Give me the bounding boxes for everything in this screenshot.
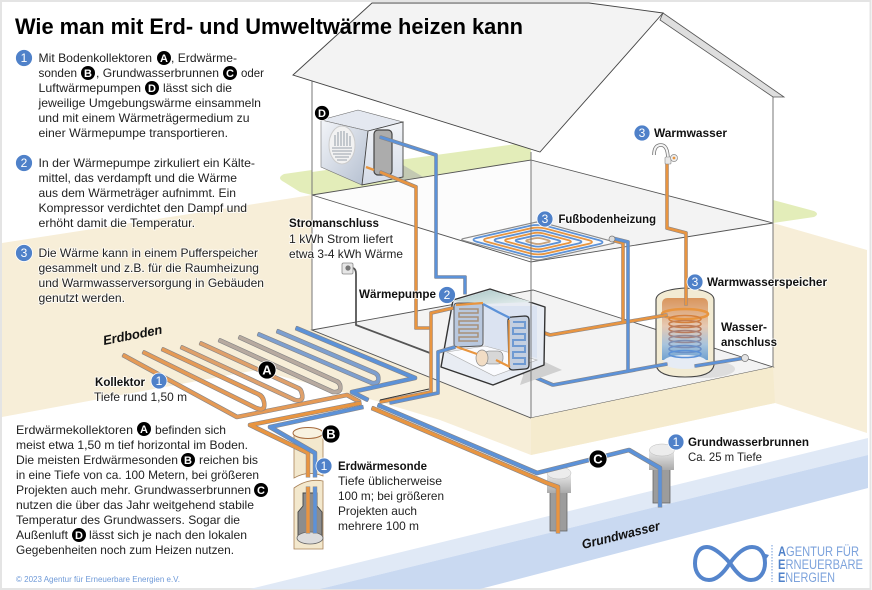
number badge (668, 434, 684, 450)
lower explanatory text: nutzen die über das Jahr weitgehend stabile (16, 498, 254, 512)
label: Kollektor (94, 373, 187, 404)
pump shadow (520, 355, 562, 385)
probe tip body (298, 493, 322, 536)
label: Kollektor: Kollektor (95, 375, 145, 389)
label: Warmwasser (634, 125, 727, 141)
number badge: 3 (639, 126, 646, 140)
house structure (293, 3, 784, 455)
pipes from unit D to heat pump (380, 137, 465, 328)
evaporator (454, 303, 483, 347)
shadow of outdoor unit (395, 165, 425, 183)
tank body (656, 288, 714, 377)
label: Kollektor: Tiefe rund 1,50 m (94, 390, 187, 404)
well pipes blue (378, 405, 660, 507)
logo: wordmark: AGENTUR FÜR (778, 544, 859, 559)
house: ground floor (312, 290, 773, 418)
number badge: 2 (444, 288, 451, 302)
badge B: B (84, 68, 92, 80)
label: Wärmepumpe (359, 286, 456, 304)
floor valve (609, 236, 615, 242)
text block 2: Kompressor verdichtet den Dampf und (38, 201, 247, 215)
badge D on unit: D (318, 108, 326, 120)
badge D: D (148, 83, 156, 95)
copyright: © 2023 Agentur für Erneuerbare Energien e.V. (16, 574, 180, 584)
text block 1: , Grundwasserbrunnen (96, 66, 219, 80)
text block 2: erhöht damit die Temperatur. (38, 216, 195, 230)
badge D (145, 81, 159, 95)
pump top (454, 290, 532, 304)
number badge 1: 1 (21, 51, 28, 65)
refrigerant return (483, 304, 510, 318)
text block 2 (16, 154, 255, 230)
text block 3: und Warmwasserversorgung in Gebäuden (38, 276, 264, 290)
badge D on unit (314, 106, 330, 120)
label: Grundwasser: Grundwasser (580, 518, 662, 552)
badge A: A (160, 53, 168, 65)
heating flow orange (513, 240, 667, 335)
unit orange stub (366, 167, 374, 170)
roof gable edge (660, 13, 784, 97)
number badge 3 (16, 244, 32, 262)
text block 3: gesammelt und z.B. für die Raumheizung (38, 261, 259, 275)
text block 1: , Erdwärme- (171, 51, 237, 65)
label: Erdwärmesonde: mehrere 100 m (338, 519, 419, 533)
lower explanatory text: Außenluft (16, 528, 69, 542)
logo: wordmark (778, 544, 863, 585)
badge A (157, 51, 171, 65)
condenser (508, 316, 529, 370)
badge C: C (226, 68, 234, 80)
unit fan (329, 126, 355, 164)
borehole probe B (250, 403, 363, 549)
pump refrigerant lines (456, 303, 510, 367)
wells (372, 405, 674, 533)
lower explanatory text: Projekten auch mehr. Grundwasserbrunnen (16, 483, 251, 497)
lower explanatory text: reichen bis (199, 453, 258, 467)
number badge: 1 (156, 374, 163, 388)
collector loop 2 (143, 349, 264, 409)
number badge 1 (16, 50, 32, 66)
pump connector lines (380, 308, 453, 402)
unit coil (374, 130, 392, 175)
number badge: 1 (321, 459, 328, 473)
hot water storage tank (656, 288, 735, 378)
unit front face (321, 120, 368, 185)
probe pipes (250, 403, 361, 533)
badge C (223, 66, 237, 80)
lower explanatory text: Erdwärmekollektoren (16, 423, 133, 437)
badge D (72, 528, 86, 542)
heat pump unit (380, 289, 562, 403)
front house corner line (530, 152, 532, 418)
roof face (293, 3, 663, 152)
text block 2: In der Wärmepumpe zirkuliert ein Kälte- (38, 156, 255, 170)
groundwater bands (250, 438, 868, 589)
label: Fußbodenheizung (537, 211, 656, 227)
badge D: D (75, 530, 83, 542)
lower explanatory text: meist etwa 1,50 m tief horizontal im Boden. (16, 438, 248, 452)
lower explanatory text: Gegebenheiten noch zum Heizen nutzen. (16, 543, 234, 557)
label: Wasseranschluss: anschluss (721, 335, 777, 349)
lower explanatory text: befinden sich (155, 423, 226, 437)
tank bottom (663, 355, 707, 369)
house: left wall (311, 80, 313, 330)
ground: Erdboden sand area (2, 195, 867, 455)
number badge (687, 274, 703, 290)
collector loop 5 (258, 331, 378, 383)
heating circuit pipes (513, 145, 748, 385)
text block 2: mittel, das verdampft und die Wärme (38, 171, 237, 185)
number badge: 3 (542, 212, 549, 226)
text block 1 (16, 50, 264, 140)
compressor (476, 350, 503, 366)
label: Wasseranschluss (721, 320, 777, 349)
well left (547, 467, 571, 531)
label: Grundwasserbrunnen (668, 434, 809, 464)
title: Wie man mit Erd- und Umweltwärme heizen kann (15, 14, 523, 39)
heating coil (469, 224, 607, 258)
label: Erdwärmesonde: 100 m; bei größeren (338, 489, 444, 503)
water connection valve (742, 354, 748, 362)
logo: dotted divider (771, 545, 773, 582)
house: right wall (772, 97, 774, 367)
label: Warmwasserspeicher: Warmwasserspeicher (707, 275, 827, 289)
tap (654, 145, 678, 164)
text block 1: lässt sich die (163, 81, 232, 95)
badge C on well pipe: C (593, 452, 603, 466)
probe shaft upper (294, 433, 323, 478)
collector loop 4 (219, 337, 340, 392)
badge C on well pipe (589, 450, 607, 468)
badge B: B (184, 455, 192, 467)
label: Stromanschluss (289, 216, 403, 261)
pump inner wall (482, 306, 537, 358)
collector loop 3 (181, 343, 302, 400)
heating plate (460, 222, 616, 260)
text block 1: Mit Bodenkollektoren (38, 51, 152, 65)
unit top face (321, 110, 403, 131)
cold water connection (695, 358, 745, 366)
badge A: A (140, 424, 148, 436)
text block 1: jeweilige Umgebungswärme einsammeln (37, 96, 261, 110)
heating return blue (513, 238, 667, 385)
label: Warmwasser: Warmwasser (654, 126, 727, 140)
number badge: 1 (673, 435, 680, 449)
probe top ring (293, 428, 323, 438)
badge B (181, 453, 195, 467)
label: Erdboden: Erdboden (102, 322, 164, 348)
tank heating coil (662, 309, 708, 358)
text block 3 (16, 244, 264, 305)
lower explanatory text: Temperatur des Grundwassers. Sogar die (16, 513, 240, 527)
label: Stromanschluss: Stromanschluss (289, 216, 379, 230)
green lawn behind the house (280, 170, 817, 223)
domestic hot water riser (667, 163, 686, 305)
number badge: 3 (692, 275, 699, 289)
lower explanatory text: Die meisten Erdwärmesonden (16, 453, 178, 467)
lower explanatory text: in eine Tiefe von ca. 100 Metern, bei größeren (16, 468, 259, 482)
text block 1: sonden (38, 66, 77, 80)
label: Grundwasserbrunnen: Grundwasserbrunnen (688, 435, 809, 449)
text block 1: einer Wärmepumpe transportieren. (38, 126, 228, 140)
house: foundation (531, 367, 775, 455)
label: Erdwärmesonde: Erdwärmesonde (338, 459, 427, 473)
badge A on collector: A (262, 362, 272, 378)
badge A (137, 422, 151, 436)
badge B on probe (322, 425, 340, 443)
number badge 2 (16, 154, 32, 172)
well pipes orange (372, 408, 558, 533)
label: Fußbodenheizung: Fußbodenheizung (558, 212, 656, 226)
cable shadow (380, 389, 429, 400)
text block 3: genutzt werden. (38, 291, 125, 305)
tank shadow (671, 360, 735, 378)
probe base (297, 532, 323, 544)
lower explanatory text: lässt sich je nach den lokalen (89, 528, 247, 542)
collector loop 6 (296, 328, 415, 400)
pump floor (447, 346, 537, 376)
badge B on probe: B (326, 426, 336, 442)
badge C: C (257, 485, 265, 497)
collector loop 1 (123, 355, 360, 417)
pump casing (441, 289, 545, 385)
badge B (81, 66, 95, 80)
house: green band seen through attic (312, 142, 531, 195)
house: upper floor left part (312, 160, 531, 262)
label: Stromanschluss: etwa 3-4 kWh Wärme (289, 247, 403, 261)
label: Wasseranschluss: Wasser- (721, 320, 767, 334)
lower explanatory text (16, 422, 268, 557)
probe shaft lower (294, 480, 323, 549)
number badge 3: 3 (21, 246, 28, 260)
badge A on collector (258, 361, 276, 379)
power cable and socket (342, 263, 430, 353)
label: Erdwärmesonde: Tiefe üblicherweise (338, 474, 442, 488)
underfloor heating (460, 222, 616, 260)
label: Erdwärmesonde (316, 458, 444, 533)
unit side face (362, 122, 403, 185)
text block 1: oder (241, 66, 264, 80)
badge C (254, 483, 268, 497)
logo: infinity icon (695, 547, 769, 580)
house: upper floor right part (531, 160, 773, 262)
label: Grundwasserbrunnen: Ca. 25 m Tiefe (688, 450, 762, 464)
well right (649, 444, 674, 503)
text block 2: aus dem Wärmeträger aufnimmt. Ein (38, 186, 236, 200)
collector field: ground loops (123, 328, 415, 417)
label: Erdwärmesonde: Projekten auch (338, 504, 417, 518)
text block 3: Die Wärme kann in einem Pufferspeicher (38, 246, 258, 260)
label: Stromanschluss: 1 kWh Strom liefert (289, 232, 394, 246)
logo: wordmark: ENERGIEN (778, 570, 835, 585)
text block 1: und mit einem Wärmeträgermedium zu (38, 111, 250, 125)
tank water (662, 298, 708, 360)
label: Wärmepumpe: Wärmepumpe (359, 287, 436, 301)
house: interior walls (312, 20, 773, 418)
logo (695, 544, 863, 585)
air heat pump unit D (321, 110, 403, 185)
text block 1: Luftwärmepumpen (38, 81, 141, 95)
number badge 2: 2 (21, 156, 28, 170)
